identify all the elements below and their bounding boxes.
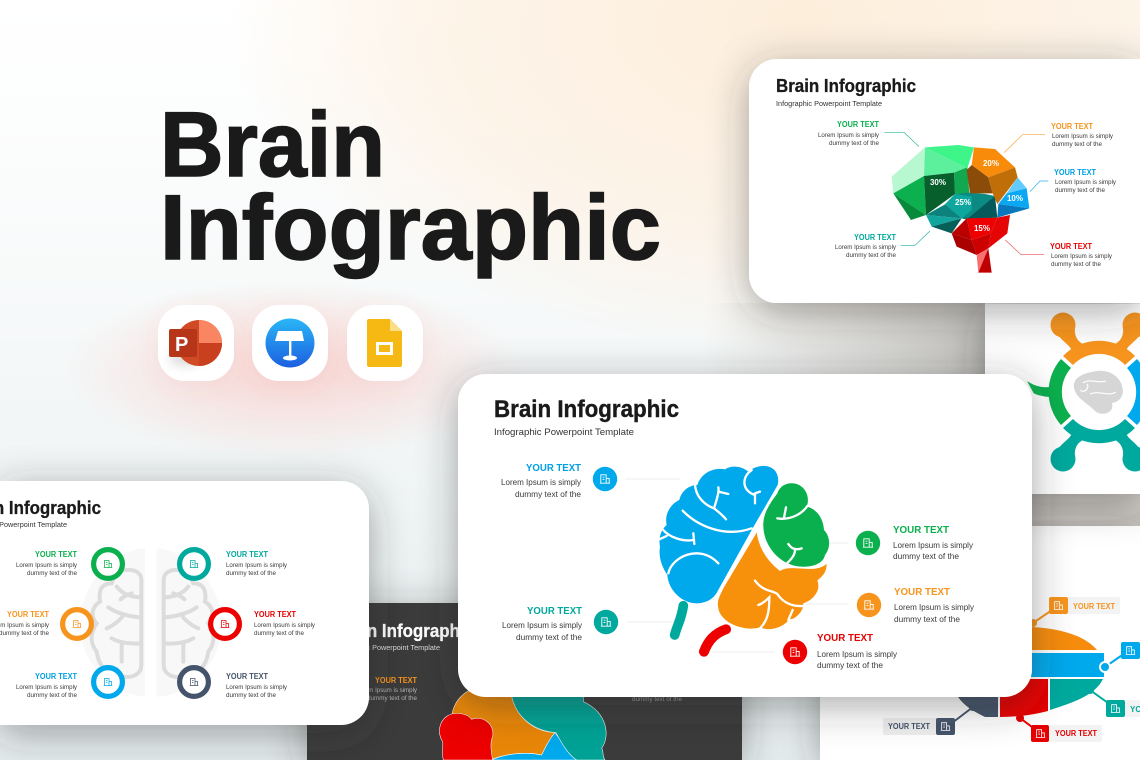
panel: right wheel slide [985,304,1140,494]
text: teal: YOUR TEXT [854,233,896,242]
text: navy: dummy text of the [226,692,277,699]
callout: blue [501,462,617,499]
text: orange: YOUR TEXT [7,610,49,619]
callout: blue: dummy text of the [515,490,581,499]
text: right: dummy text of the [632,696,683,703]
callout: red [783,632,897,670]
title: Brain [160,94,385,196]
callout: orange: YOUR TEXT [1073,602,1115,611]
percent labels: 20% [983,159,999,168]
icon: Keynote [252,305,328,381]
text: green [818,120,880,147]
percent labels: 15% [974,224,990,233]
brain lobe: orange [717,530,827,630]
heading: Infographic Powerpoint Template [334,645,440,652]
text: orange [0,610,50,637]
heading: Brain Infographic [494,396,679,423]
chart: colour brain [659,466,829,652]
connector lines [625,479,848,652]
text: red: Lorem Ipsum is simply [254,622,316,629]
callout: teal [1086,686,1140,717]
text: red [1050,242,1113,268]
brain stem: teal [675,606,683,635]
wheel: blue segment [1127,359,1140,425]
node: teal [180,550,208,578]
text: orange: dummy text of the [1052,141,1103,148]
callout: orange: Lorem Ipsum is simply [894,603,974,612]
node: red [211,610,239,638]
text: blue: Lorem Ipsum is simply [16,684,78,691]
wheel: orange segment [1050,312,1140,365]
text: blue: dummy text of the [27,692,78,699]
callout: orange [1029,597,1120,627]
callout: orange [857,586,974,624]
callout: navy [883,703,977,735]
text: orange: YOUR TEXT [375,676,417,685]
percent labels [930,159,1023,233]
node: orange [63,610,91,638]
icon: PowerPoint [158,305,234,381]
callout: blue: YOUR TEXT [526,462,582,474]
callout: green [856,524,973,561]
text: orange: YOUR TEXT [1051,122,1093,131]
callout: orange: dummy text of the [894,615,960,624]
callout: red: YOUR TEXT [817,632,874,644]
text: green: YOUR TEXT [35,550,77,559]
node: navy [180,668,208,696]
callout: teal [502,605,618,642]
text: red: dummy text of the [1051,261,1102,268]
callout: green: Lorem Ipsum is simply [893,541,973,550]
heading: Infographic Powerpoint Template [494,427,634,438]
callout: navy: YOUR TEXT [888,722,930,731]
callout: green: YOUR TEXT [893,524,950,536]
text: green: YOUR TEXT [837,120,879,129]
panel: bottom-right slide [820,526,1140,760]
text: blue: dummy text of the [1055,187,1106,194]
text: orange: dummy text of the [0,630,50,637]
panel: dark slide [307,603,742,760]
text: green: dummy text of the [829,140,880,147]
heading: Infographic Powerpoint Template [776,101,882,108]
text: orange: Lorem Ipsum is simply [1052,133,1114,140]
text: red: YOUR TEXT [1050,242,1092,251]
heading [776,76,916,108]
text: green: Lorem Ipsum is simply [16,562,78,569]
icon: PowerPoint: P [175,334,188,356]
text: blue: YOUR TEXT [35,672,77,681]
text: blue [16,672,78,699]
heading [334,621,474,652]
callout: red: Lorem Ipsum is simply [817,650,897,659]
wheel: green segment [1027,359,1071,425]
callout: blue [1100,642,1140,672]
text: green: Lorem Ipsum is simply [818,132,880,139]
panel: main slide [458,374,1032,697]
percent labels: 10% [1007,194,1023,203]
text: red: Lorem Ipsum is simply [1051,253,1113,260]
text: navy [226,672,288,699]
text: teal: YOUR TEXT [226,550,268,559]
brain segments [958,627,1104,717]
text: navy: YOUR TEXT [226,672,268,681]
wheel: teal segment [1050,419,1140,472]
callout: blue: Lorem Ipsum is simply [501,478,581,487]
chart: grey brain halves [80,548,222,697]
text: teal: Lorem Ipsum is simply [226,562,288,569]
chart: blob brain [439,690,606,760]
text: teal: dummy text of the [846,252,897,259]
panel: top-right slide [749,59,1140,303]
heading: Brain Infographic [776,76,916,96]
title [160,94,661,279]
heading [0,498,101,529]
text: blue [1054,168,1117,194]
icon: grey brain [1074,371,1123,414]
text: blue: YOUR TEXT [1054,168,1096,177]
text: navy: Lorem Ipsum is simply [226,684,288,691]
callout: orange: YOUR TEXT [894,586,951,598]
text: orange [356,676,418,702]
text: red [254,610,316,637]
percent labels: 25% [955,198,971,207]
brain lobe: green [763,483,829,567]
title: Infographic [160,177,661,279]
heading [494,396,679,438]
icon: Google Slides [347,305,423,381]
callout: red [1016,714,1102,742]
heading: Brain Infographic [334,621,474,641]
text: red: dummy text of the [254,630,305,637]
node: green [94,550,122,578]
text: teal [835,233,897,259]
callout: red: dummy text of the [817,661,883,670]
text: orange: Lorem Ipsum is simply [356,687,418,694]
text: green: dummy text of the [27,570,78,577]
callout: green: dummy text of the [893,552,959,561]
text: teal: Lorem Ipsum is simply [835,244,897,251]
chart: polygon brain [884,132,1048,273]
text: blue: Lorem Ipsum is simply [1055,179,1117,186]
panel: left slide [0,481,369,725]
percent labels: 30% [930,178,946,187]
node: blue [94,668,122,696]
brain lobe: blue [659,466,778,603]
text: green [16,550,78,577]
callout: teal: dummy text of the [516,633,582,642]
callout: red: YOUR TEXT [1055,729,1097,738]
callout: teal: Lorem Ipsum is simply [502,621,582,630]
text: red: YOUR TEXT [254,610,296,619]
text: orange [1051,122,1114,148]
text: teal: dummy text of the [226,570,277,577]
text: orange: dummy text of the [367,695,418,702]
brain stem: red [704,629,726,652]
callout: teal: YOUR TEXT [527,605,583,617]
text: teal [226,550,288,577]
